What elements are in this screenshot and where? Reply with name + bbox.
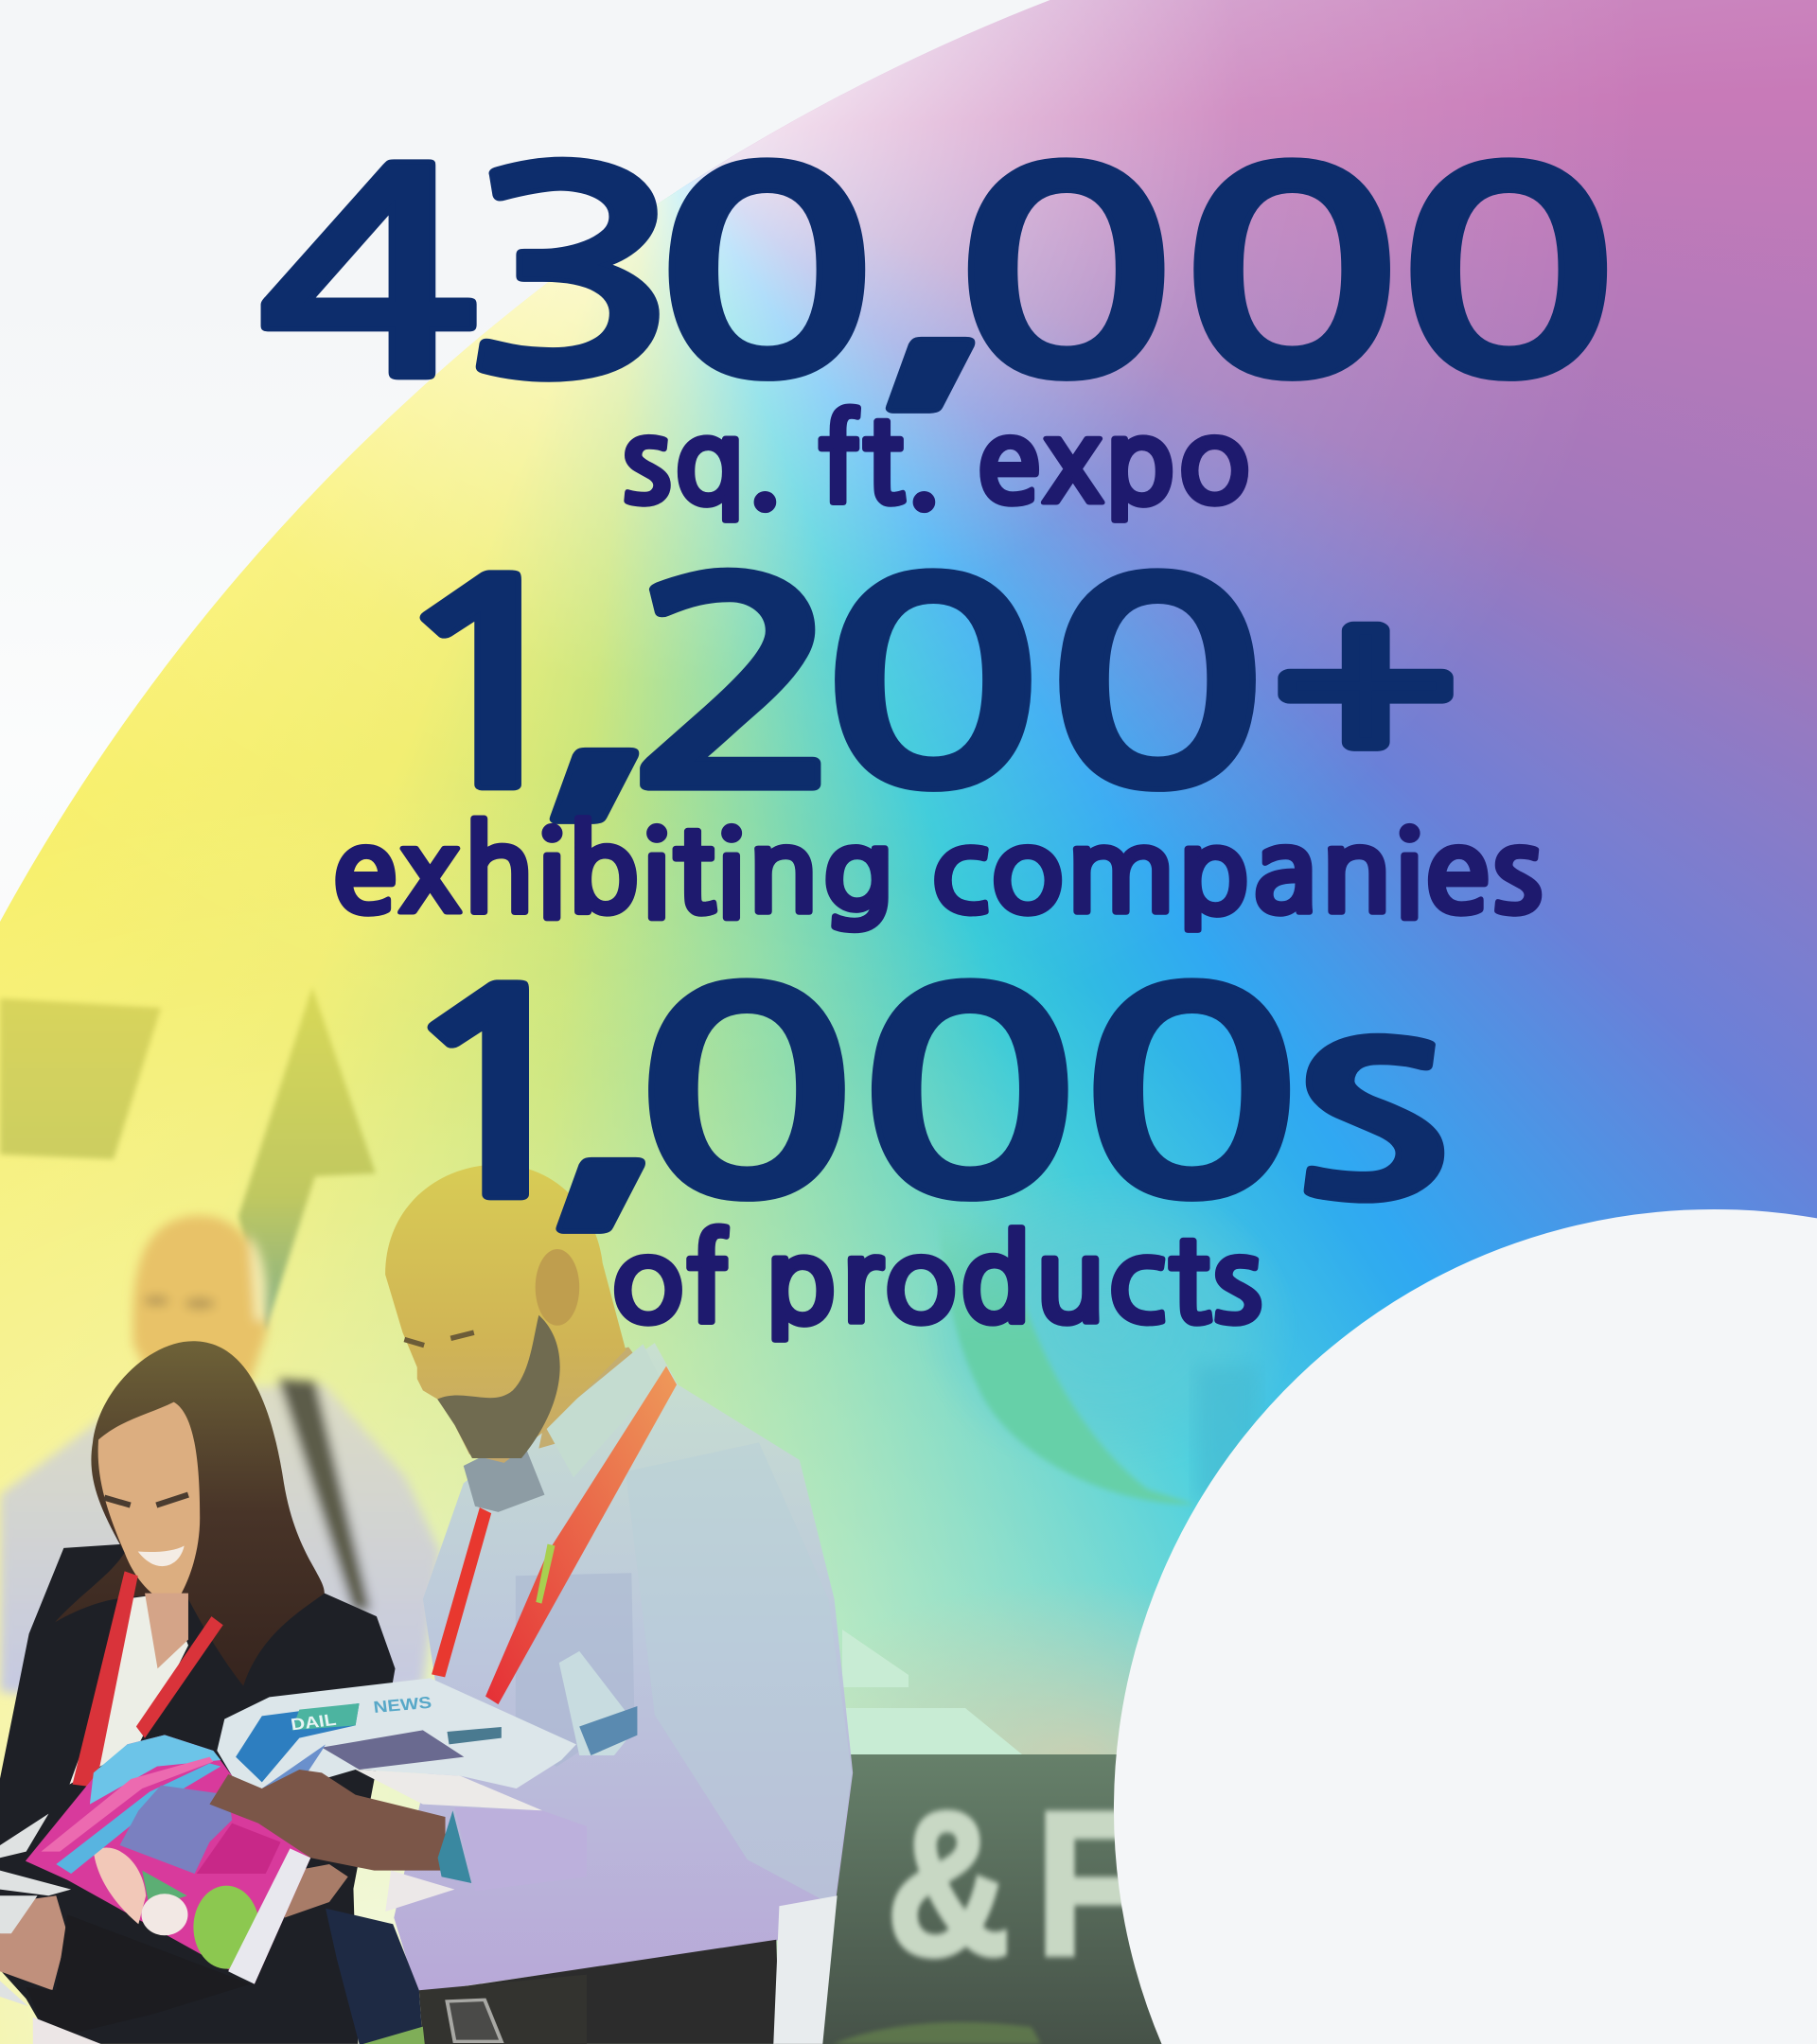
stat: 1,000s: 0 (1075, 959, 1306, 1240)
photo figures (0, 1165, 853, 2044)
stat: 430,000: 0 (950, 138, 1180, 419)
label: sq. ft. expo: sq. ft. expo (621, 404, 1251, 521)
stat: 430,000: 3 (456, 138, 687, 419)
stat: 1,200+: 1 (374, 549, 605, 830)
stat: 1,200+: 0 (817, 549, 1048, 830)
stat: 1,000s: 1 (381, 959, 612, 1240)
stat: 430,000: 4 (254, 138, 485, 419)
stat: 1,200+: + (1272, 588, 1458, 799)
daily news magazine page: NEWS (373, 1694, 432, 1718)
pale counter near banner (842, 1630, 1022, 1754)
belt (419, 1975, 587, 2044)
stat: 1,200+: 2 (622, 549, 852, 830)
stat: 1,000s: s (1291, 959, 1453, 1240)
background man (0, 1215, 440, 1715)
woman (0, 1341, 396, 2044)
shirt cuff (454, 1807, 587, 1891)
stat: 1,000s: , (534, 898, 672, 1235)
white glow upper centre (108, 0, 1485, 941)
blurred expo banner (776, 1754, 1173, 2044)
photo: attendees reading show daily at expo (0, 990, 1261, 2044)
woman's left hand (0, 1895, 67, 1990)
blurred ring on backdrop (943, 1206, 1261, 1507)
candy advertisement page (26, 1735, 310, 1984)
papers held at left (0, 1814, 71, 2006)
belt buckle (448, 2000, 502, 2041)
stat: 1,200+: 0 (1041, 549, 1272, 830)
shadow band on backdrop (1196, 1373, 1251, 1493)
foliage at bottom (363, 2027, 425, 2044)
woman's lower hand (285, 1864, 348, 1918)
daily news magazine page (217, 1678, 576, 1810)
daily news magazine page: DAIL (290, 1711, 338, 1735)
magazine, hands and lower details (0, 1678, 587, 2044)
navy trousers behind (326, 1909, 423, 2044)
man (385, 1165, 853, 2044)
stat: 1,000s: 0 (854, 959, 1084, 1240)
pale fade over lower left area (0, 854, 1342, 2044)
stat: 430,000: 0 (650, 138, 881, 419)
stat: 430,000: 0 (1175, 138, 1406, 419)
stat: 430,000: 0 (1392, 138, 1623, 419)
man's hand (209, 1770, 446, 1871)
label: of products: of products (610, 1224, 1263, 1341)
stat: 430,000: , (864, 78, 1002, 414)
beige wall near banner (869, 1600, 1150, 1754)
blurred backdrop lettering (0, 987, 376, 1331)
woman's sleeve (26, 1914, 251, 2039)
stat: 1,200+: , (527, 488, 666, 825)
badge tag at bottom (33, 2018, 101, 2044)
blurred expo banner: & F (887, 1771, 1140, 1999)
label: exhibiting companies: exhibiting companies (331, 814, 1544, 931)
attendee badge (385, 1871, 454, 1912)
stat: 1,000s: 0 (630, 959, 861, 1240)
wristwatch (438, 1810, 471, 1883)
